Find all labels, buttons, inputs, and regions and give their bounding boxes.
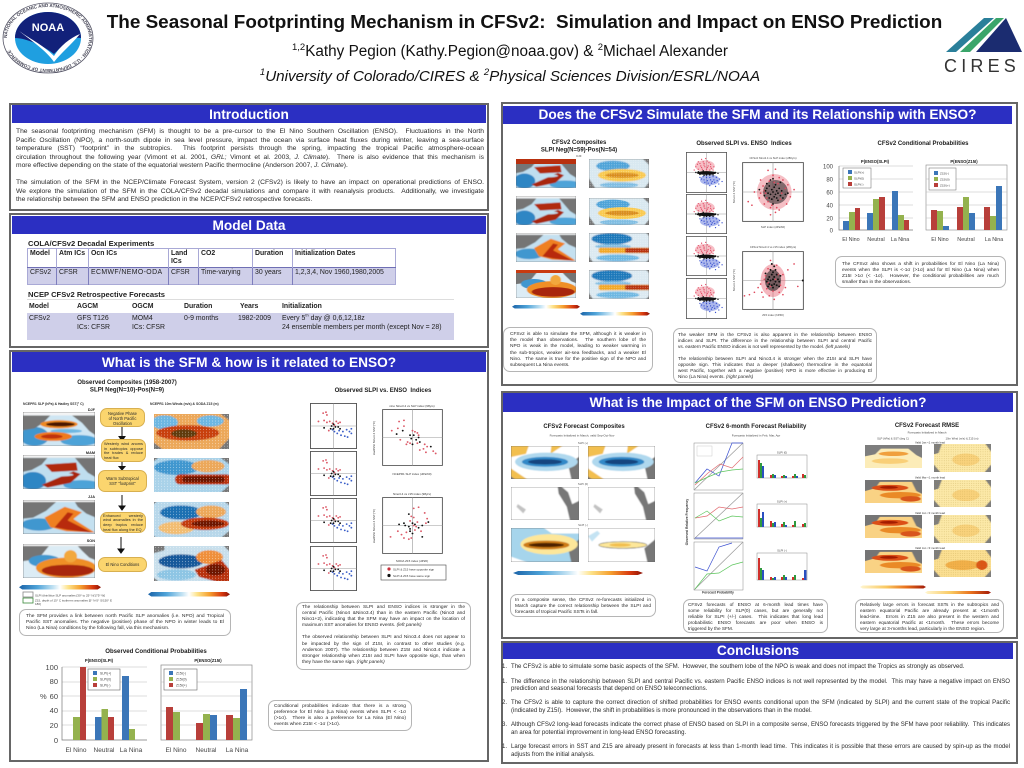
- conclusion 5: Large forecast errors in SST and Z15 are already present in forecasts at less than 1-month lead time. This indicates it is possible that these errors are caused by spin-up as the model: [511, 744, 1010, 750]
- bar chart: P(ENSO|Z15I): [926, 159, 1007, 243]
- table: NCEP retrospective forecasts: [27, 299, 454, 340]
- bar chart: P(ENSO|SLPI): 60: [826, 190, 834, 196]
- bar chart: P(ENSO|SLPI): SLPI(+): [854, 170, 864, 174]
- bar chart: P(ENSO|SLPI): P(ENSO(SLPI): [85, 658, 114, 663]
- bar chart: P(ENSO|SLPI): SLPI(0): [854, 176, 864, 180]
- table: NCEP retrospective forecasts: MOM4: [132, 315, 153, 322]
- flow box: westerly winds: heat flux: [104, 455, 119, 460]
- bar chart: P(ENSO|SLPI): SLPI(+): [100, 672, 111, 676]
- table: NCEP retrospective forecasts: 24 ensemble members per month (except Nov = 28): [282, 324, 442, 330]
- callout: conditional probabilities: [268, 700, 412, 731]
- bar chart: P(ENSO|SLPI): 80: [50, 677, 58, 686]
- scatter plot: Z15 index: Nino3.4 vs z15 index (98yrs): [393, 492, 431, 496]
- callout: CFSv2 probability shift: smaller than in the observations.: [842, 280, 911, 285]
- map series: winds and Z15 composites: [150, 410, 234, 585]
- table: NCEP retrospective forecasts: 1982-2009: [238, 315, 271, 322]
- flow box: negative phase: [100, 408, 145, 427]
- callout: weaker SFM: The relationship between SLPI and Nino3.4 is stronger when the Z15I and SLPI have: [678, 356, 872, 361]
- colorbar: winds: [580, 312, 650, 316]
- header: title and logos: [2, 2, 1022, 85]
- table: COLA decadal experiments: ECMWF/NEMO-ODA: [91, 269, 162, 276]
- legend: scatter: [381, 565, 446, 580]
- flow box: enhanced westerly: heat flux along the EQ: [103, 527, 142, 532]
- scatter plot: Z15 index: [372, 492, 442, 563]
- flow box: westerly winds: the trades & reduce: [104, 450, 143, 455]
- callout: SLPI relationship: The relationship between SLPI and ENSO indices is stronger in the: [302, 605, 465, 610]
- icon: NOAA logo: NOAA: [32, 22, 64, 34]
- maps: RMSE winds and Z15: Valid Jan <1 month lead: [915, 440, 945, 444]
- chart title: SLP: NCEPR1 SLP (hPa) & Hadley SST(° C): [23, 402, 84, 406]
- text block: introduction: temperature (SST) “footprint” in the subtropics. This footprint persists through the spring, impacting the tropical Pacific atmosphere-ocean: [16, 145, 484, 152]
- bar chart: P(ENSO|SLPI): Neutral: [867, 237, 885, 243]
- flow box: enhanced westerly: Enhanced westerly: [103, 512, 143, 518]
- heading: Introduction: [12, 105, 486, 123]
- table: NCEP retrospective forecasts: 0-9 months: [184, 315, 218, 322]
- table: NCEP retrospective forecasts: ICs: CFSR: [77, 324, 110, 330]
- bar chart: P(ENSO|Z15I): Z15I(-): [176, 672, 186, 676]
- flow box: El Nino conditions: El Nino Conditions: [106, 562, 139, 567]
- callout: weaker SFM: [673, 328, 877, 383]
- table: COLA decadal experiments: Time-varying: [201, 269, 241, 276]
- title: The Seasonal Footprinting Mechanism in CFSv2: Simulation and Impact on ENSO Prediction: [107, 12, 942, 33]
- scatter plots: SLPI vs ENSO: [310, 403, 357, 591]
- bar chart: P(ENSO|SLPI): 0: [830, 228, 834, 234]
- legend: scatter: SLPI & Z15 have same sign: [393, 574, 431, 578]
- callout: RMSE: Relatively large errors in forecast SSTs in the subtropics and: [860, 602, 999, 606]
- scatter plot: SLP index: NCEPR1 SLP index (dPa/60): [393, 472, 431, 476]
- flow box: enhanced westerly: wind anomalies in the: [103, 517, 143, 522]
- bar chart: P(ENSO|Z15I): Z15I(0): [940, 178, 950, 182]
- bar chart: P(ENSO|SLPI): [40, 658, 147, 754]
- scatter plot: SLP index: [372, 404, 442, 476]
- affiliations: 1University of Colorado/CIRES & 2Physical Sciences Division/ESRL/NOAA: [260, 67, 760, 85]
- table: NCEP retrospective forecasts: Initialization: [282, 303, 322, 310]
- legend: contours: 180]: [35, 602, 41, 606]
- scatter plot: Z15 index: SODA Z15 index (dP20): [396, 559, 428, 563]
- maps: RMSE winds and Z15: [915, 436, 994, 580]
- table: COLA decadal experiments: 30 years: [255, 269, 281, 276]
- flow box: warm SST footprint: [98, 470, 147, 492]
- table: COLA decadal experiments: CFSv2: [30, 269, 51, 276]
- table: COLA decadal experiments: Initialization Dates: [295, 250, 356, 257]
- maps: RMSE SLP and SST: [862, 436, 925, 576]
- bar chart: SLPI(0) counts: [757, 450, 807, 478]
- bar chart: P(ENSO|SLPI): %: [40, 692, 47, 701]
- panel: Model Data: [9, 213, 489, 348]
- bar chart: P(ENSO|SLPI): 0: [54, 736, 58, 745]
- conclusion 4: an area for potential improvement in long-lead ENSO forecasting.: [511, 730, 686, 736]
- conclusion 2: [502, 678, 1010, 692]
- callout: weaker SFM: west Pacific, together with a negative (positive) NPO is more effective in producing El: [678, 368, 872, 373]
- table: COLA decadal experiments: CO2: [201, 250, 215, 257]
- line chart: reliability SLPI(-): [694, 542, 743, 590]
- scatter plot: Nino3.4 vs Z15: [732, 245, 803, 317]
- flow arrow: [118, 537, 124, 553]
- bar chart: P(ENSO|Z15I): La Nina: [985, 237, 1003, 243]
- colorbar: SLP: [19, 585, 101, 590]
- scatter plot: Nino3.4 vs Z15: CFSv2 Nino3.4 vs z15 index (280yrs): [750, 245, 796, 249]
- text block: introduction: The simulation of the SFM in the NCEP/Climate Forecast System, version 2 (CFSv2) is likely to have an impact on operational predictions of ENSO.: [16, 179, 484, 186]
- callout: reliability: triggered by the SFM.: [688, 626, 733, 631]
- conclusion 3: [502, 700, 1010, 714]
- bar chart: SLPI(-) counts: [757, 548, 807, 580]
- scatter plot: Nino3.4 vs SLP: Nino3.4 SST(°C): [732, 181, 736, 203]
- map series: SLP and SST composites: [19, 408, 101, 582]
- panel: Conclusions: [501, 641, 1018, 764]
- bar chart: P(ENSO|SLPI): 40: [50, 706, 58, 715]
- callout: CFSv2 SFM simulation: subsequent La Nina events.: [510, 363, 569, 368]
- callout: RMSE: eastern equatorial Pacific at <1month. These errors become: [860, 620, 999, 625]
- conclusion 2: The difference in the relationship between SLPI and central Pacific vs. eastern Pacific ENSO indices is not well represented by the model. This may have a negative impact on ENSO: [511, 678, 1010, 684]
- callout: SFM link: [19, 609, 231, 636]
- table: NCEP retrospective forecasts: ICs: CFSR: [132, 324, 165, 330]
- text block: introduction: the relationship between the SFM and ENSO prediction in the NCEP/CFSv2 retrospective forecasts.: [16, 196, 312, 203]
- bar chart: P(ENSO|Z15I): Neutral: [196, 747, 217, 754]
- callout: SLPI relationship: maximum SST anomalies for ENSO events. (left panels): [302, 623, 422, 628]
- flow box: enhanced westerly: deep tropics reduce: [103, 522, 143, 527]
- conclusion 5: adjusts from the initial analysis.: [511, 752, 595, 758]
- callout: weaker SFM: The weaker SFM in the CFSv2 is also apparent in the relationship between ENSO: [678, 332, 872, 336]
- table: COLA decadal experiments: CFSR: [59, 269, 78, 276]
- bar chart: P(ENSO|Z15I): La Nina: [226, 747, 249, 754]
- axis labels: reliability: [685, 499, 734, 594]
- bar chart: P(ENSO|Z15I): Z15I(0): [176, 678, 187, 682]
- colorbar: winds: [148, 592, 230, 596]
- flow box: negative phase: Negative Phase: [108, 410, 137, 416]
- table title: COLA: COLA/CFSv2 Decadal Experiments: [28, 239, 154, 248]
- panel: Conclusions: 1.: [502, 678, 507, 684]
- bar chart: P(ENSO|SLPI): El Nino: [66, 747, 87, 754]
- callout: weaker SFM: indices and SLPI. The difference in the relationship between SLPI and central Pacific: [678, 338, 872, 343]
- flow box: warm SST footprint: Warm Subtropical: [106, 476, 139, 481]
- bar chart: P(ENSO|SLPI): 100: [45, 663, 58, 672]
- callout: conditional probabilities: events when Z15I < -1σ (>1σ).: [274, 722, 340, 727]
- colorbar: RMSE SLP: [860, 586, 926, 588]
- text block: introduction: more effective depending on the state of the equatorial western Pacific thermocline (Anderson 2007, J. Climate).: [16, 162, 348, 169]
- line chart: reliability SLPI(0): [694, 493, 743, 539]
- callout: SFM link: The SFM provides a link between north Pacific SLP anomalies (i.e. NPO) and Tropical: [26, 614, 224, 618]
- callout: RMSE: eastern equatorial Pacific are already present at <1month: [860, 608, 999, 613]
- heading: conditional probabilities: Observed Conditional Probabilities: [105, 648, 207, 655]
- table: COLA decadal experiments: Land ICs: [171, 250, 187, 265]
- maps: RMSE winds and Z15: Valid Jun <3 month lead: [915, 511, 945, 515]
- table: NCEP retrospective forecasts: Duration: [184, 303, 212, 310]
- flow box: warm SST footprint: SST “footprint”: [109, 481, 136, 486]
- callout: CFSv2 SFM simulation: NPO is weak in the model, leading to weaker warming in: [510, 344, 646, 349]
- callout: SFM link: Nino (La Nina) conditions by the following fall, via this mechanism.: [26, 626, 169, 631]
- table: NCEP retrospective forecasts: AGCM: [77, 303, 98, 310]
- heading: CFSv2 composites: CFSv2 Composites: [552, 140, 606, 146]
- callout: CFSv2 SFM simulation: the model than observations. The southern lobe of the: [510, 338, 646, 343]
- bar chart: P(ENSO|Z15I): Z15I(+): [940, 184, 950, 188]
- text block: introduction: The seasonal footprinting mechanism (SFM) is thought to be a pre-cursor to the El Nino Southern Oscillation (ENSO). Fluctuations in the North: [16, 128, 484, 135]
- conclusion 2: prediction and seasonal forecasts that depend on ENSO teleconnections.: [511, 686, 707, 692]
- table: NCEP retrospective forecasts: OGCM: [132, 303, 153, 310]
- bar chart: P(ENSO|SLPI): 100: [823, 164, 834, 170]
- callout: forecast composites: [510, 594, 656, 617]
- table: NCEP retrospective forecasts: GFS T126: [77, 315, 109, 322]
- callout: forecast composites: March capture the correct relationship between the SLPI and: [515, 604, 651, 609]
- callout: reliability: [683, 599, 828, 633]
- callout: SLPI relationship: The observed relationship between SLPI and Nino3.4 does not appear to: [302, 635, 465, 640]
- text block: introduction: circulation throughout the following year (Vimont et al. 2001, GRL; Vimont et al. 2003, J. Climate). There is also evidence that this mechanism is: [16, 154, 484, 160]
- panel: Conclusions: 1.: [502, 744, 507, 750]
- heading: observed composites: Observed Composites (1958-2007): [77, 379, 177, 386]
- flow box: negative phase: of North Pacific: [109, 416, 136, 420]
- flow arrow: [119, 427, 125, 441]
- map series: SLP and SST composites: JJA: [88, 495, 95, 499]
- maps: RMSE winds and Z15: Valid Jun <3 month lead: [915, 546, 945, 550]
- maps: CFSv2 SLP and SST composites: DJF: [576, 154, 582, 158]
- table: NCEP retrospective forecasts: CFSv2: [29, 315, 50, 322]
- bar chart: P(ENSO|SLPI): P(ENSO(SLPI): [861, 159, 890, 164]
- icon: CIRES logo: [944, 18, 1022, 76]
- heading: CFSv2 conditional probabilities: CFSv2 Conditional Probabilities: [877, 141, 969, 147]
- flow box: negative phase: Oscillation: [113, 420, 132, 426]
- subheading: RMSE: Forecasts Initialized in March: [908, 430, 947, 434]
- callout: SLPI relationship: be impacted by the sign of Z15I, in contrast to other studies (e.g.: [302, 642, 465, 647]
- callout: SLPI relationship: Anderson 2007). The relationship between Z15I and Nino3.4 indicate a: [302, 648, 465, 653]
- callout: reliability: some reliability for SLP(0) cases, but are generally not: [688, 608, 823, 613]
- panel: Does the CFSv2 simulate the SFM: [501, 102, 1018, 386]
- bar chart: SLPI(-) counts: SLPI (-): [777, 548, 787, 552]
- heading: Impact of the SFM: [503, 393, 1013, 412]
- scatter plots: CFSv2 SLPI vs ENSO: [686, 152, 727, 319]
- callout: conditional probabilities: (>1σ). There is also a preference for La Nina (El Nino): [274, 716, 406, 721]
- bar chart: P(ENSO|SLPI): El Nino: [842, 237, 860, 243]
- callout: CFSv2 probability shift: The CFSv2 also shows a shift in probabilities for El Nino (La Nina): [842, 262, 999, 266]
- flow box: El Nino conditions: [98, 557, 147, 572]
- table: NCEP retrospective forecasts: Model: [29, 303, 49, 310]
- colorbar: forecast composites: [513, 571, 643, 575]
- callout: weaker SFM: opposite sign. This indicates that a deeper (shallower) thermocline in the equatorial: [678, 362, 872, 367]
- callout: CFSv2 probability shift: [835, 256, 1006, 288]
- callout: CFSv2 SFM simulation: [503, 327, 653, 372]
- text block: introduction: [16, 128, 484, 203]
- maps: forecast composites: SLPI (0): [578, 482, 588, 486]
- callout: RMSE: very large at 3-months lead, particularly in the ENSO region.: [860, 626, 985, 631]
- heading: Impact of the SFM: What is the Impact of the SFM on ENSO Prediction?: [590, 395, 926, 410]
- subheading: reliability: Forecasts Initialized in Feb, Mar, Apr: [732, 434, 780, 438]
- maps: RMSE SLP and SST: SLP (hPa) & SST (deg C): [877, 436, 909, 440]
- heading: Conclusions: Conclusions: [717, 643, 799, 658]
- bar chart: SLPI(0) counts: SLPI (0): [777, 450, 787, 454]
- bar chart: P(ENSO|Z15I): P(ENSO(Z15I): [194, 658, 222, 663]
- bar chart: P(ENSO|Z15I): El Nino: [931, 237, 949, 243]
- map series: SLP and SST composites: SON: [87, 539, 95, 543]
- axis labels: reliability: Observed Relative Frequency: [685, 499, 689, 545]
- flow box: westerly winds: Westerly wind anoms: [104, 441, 143, 446]
- maps: forecast composites: SLPI (+): [578, 441, 588, 445]
- bar chart: P(ENSO|SLPI): SLPI(-): [854, 182, 864, 186]
- maps: forecast composites: [507, 441, 659, 566]
- callout: SLPI relationship: central Pacific (Nino4 &Nino3.4) than in the eastern Pacific (Nino3 and: [302, 611, 465, 616]
- heading: Model Data: Model Data: [212, 218, 286, 232]
- chart title: winds: NCEPR1 10m Winds (m/s) & SODA Z15 (m): [150, 402, 219, 406]
- callout: RMSE: lead-time. Errors in Z15 are also present in the western and: [860, 614, 999, 619]
- bar chart: P(ENSO|SLPI): 60: [50, 692, 58, 701]
- heading: CFSv2 composites: SLPI Neg(N=59)-Pos(N=54): [541, 147, 617, 153]
- flow arrow: [119, 462, 125, 470]
- icon: NOAA logo: NATIONAL OCEANIC AND ATMOSPHERIC ADMINISTRATION · U.S. DEPARTMENT OF COMMERCE: [4, 4, 92, 72]
- callout: conditional probabilities: Conditional probabilities indicate that there is a strong: [274, 704, 406, 709]
- heading: What is the SFM: What is the SFM & how is it related to ENSO?: [102, 354, 396, 370]
- flow box: westerly winds: [101, 439, 146, 462]
- axis labels: reliability: Forecast Probability: [702, 590, 734, 594]
- panel: Conclusions: 1.: [502, 664, 507, 670]
- bar chart: P(ENSO|Z15I): P(ENSO(Z15I): [950, 159, 978, 164]
- bar chart: P(ENSO|SLPI): [823, 159, 913, 243]
- bar chart: P(ENSO|Z15I): [161, 658, 252, 754]
- flow box: enhanced westerly: [100, 512, 146, 533]
- bar chart: P(ENSO|SLPI): 40: [826, 204, 834, 210]
- maps: CFSv2 winds and Z15 composites: [585, 156, 653, 302]
- text block: conclusions: [502, 664, 1010, 758]
- scatter plot: Nino3.4 vs SLP: [732, 156, 803, 229]
- maps: CFSv2 SLP and SST composites: [512, 154, 582, 301]
- bar chart: P(ENSO|SLPI): La Nina: [891, 237, 909, 243]
- heading: Model Data: [12, 216, 486, 234]
- conclusion 4: [502, 722, 1010, 736]
- bar chart: P(ENSO|SLPI): 20: [826, 216, 834, 222]
- legend: contours: SLPI (thin/blue SLP anomalies [30° to 25° N/175° W]: [35, 594, 105, 598]
- bar chart: P(ENSO|Z15I): Neutral: [957, 237, 975, 243]
- callout: CFSv2 SFM simulation: Nino. The same is true for the positive sign of the NPO and: [510, 357, 646, 362]
- table: COLA decadal experiments: 1,2,3,4, Nov 1960,1980,2005: [295, 269, 384, 276]
- table: COLA decadal experiments: [27, 248, 396, 285]
- scatter plot: Nino3.4 vs Z15: Nino3.4 SST(°C): [732, 269, 736, 291]
- maps: RMSE winds and Z15: Valid Mar <1 month lead: [915, 476, 946, 480]
- callout: SLPI relationship: they have the same sign. (right panels): [302, 660, 385, 665]
- conclusion 3: (indicated by Z15I). However, the shift in probabilities is more pronounced in the observations than in the model.: [511, 708, 812, 714]
- icon: CIRES logo: CIRES: [944, 56, 1020, 76]
- callout: reliability: CFSv2 forecasts of ENSO at 6-month lead times have: [688, 602, 823, 606]
- maps: forecast composites: SLPI (-): [578, 523, 588, 527]
- callout: SLPI relationship: [296, 602, 471, 670]
- flow arrow: [119, 495, 125, 510]
- scatter plot: Nino3.4 vs SLP: CFSv2 Nino3.4 vs SLP index (280yrs): [749, 156, 797, 160]
- bar chart: P(ENSO|Z15I): Z15I(+): [176, 684, 187, 688]
- bar chart: P(ENSO|SLPI): La Nina: [120, 747, 143, 754]
- panel: Impact of the SFM on ENSO prediction: [501, 391, 1018, 639]
- line chart: reliability SLPI(+): [694, 443, 743, 490]
- heading: Does the CFSv2 simulate: Does the CFSv2 Simulate the SFM and its Relationship with ENSO?: [538, 107, 977, 122]
- callout: conditional probabilities: preference for El Nino (La Nina) events when SLPI < -1σ: [274, 710, 406, 715]
- panel: Introduction: [9, 103, 489, 211]
- bar chart: P(ENSO|SLPI): 80: [826, 178, 834, 184]
- heading: observed SLPI: Observed SLPI vs. ENSO Indices: [696, 141, 792, 147]
- authors: 1,2Kathy Pegion (Kathy.Pegion@noaa.gov) & 2Michael Alexander: [292, 42, 728, 60]
- legend: contours: [23, 592, 112, 606]
- callout: CFSv2 SFM simulation: the sub-tropics, weaker air-sea feedbacks, and a weaker El: [510, 351, 646, 356]
- table: COLA decadal experiments: Atm ICs: [59, 250, 85, 257]
- map series: SLP and SST composites: DJF: [88, 408, 96, 412]
- legend: contours: Z15, depth of 15° C isotherm anomalies [5° N-5° S/150° E: [35, 598, 112, 602]
- scatter plot: SLP index: nino Nino3.4 vs SLP index (98yrs): [389, 404, 435, 408]
- callout: reliability: probabilistic ENSO forecasts are poor when ENSO is: [688, 620, 823, 625]
- conclusion 5: [502, 744, 1010, 758]
- scatter plot: Nino3.4 vs SLP: SLP index (dPa/60): [761, 225, 785, 229]
- bar chart: P(ENSO|SLPI): SLPI(-): [100, 684, 110, 688]
- table: COLA decadal experiments: Ocn ICs: [91, 250, 117, 257]
- bar chart: SLPI(+) counts: [757, 500, 807, 527]
- table: COLA decadal experiments: Model: [30, 250, 50, 257]
- colorbar: SLP: [512, 305, 580, 308]
- callout: forecast composites: forecasts of tropical Pacific SSTs in fall.: [515, 610, 598, 615]
- conclusion 4: Although CFSv2 long-lead forecasts indicate the correct phase of ENSO based on SLPI in a composite sense, ENSO forecasts triggered by the SFM have poor reliability. This indicates: [511, 722, 1010, 728]
- scatter plot: SLP index: HadISSt Nino3.4 SST(°C): [372, 421, 376, 455]
- callout: CFSv2 probability shift: events when the SLPI is <-1σ (>1σ) and for El Nino (La Nina) when: [842, 268, 999, 273]
- callout: reliability: reliable for SLPI (+/-) cases. This indicates that long lead: [688, 614, 823, 619]
- bar chart: P(ENSO|SLPI): SLPI(0): [100, 678, 111, 682]
- conclusion 1: The CFSv2 is able to simulate some basic aspects of the SFM. However, the southern lobe of the NPO is weak and does not impact the Tropics as strongly as observed.: [511, 664, 964, 670]
- text block: introduction: Pacific Oscillation (NPO), a north-south dipole in sea level pressure, impact the ocean via surface heat fluxes during winter, leaving a sea-surface: [16, 136, 484, 144]
- panel: Conclusions: 2.: [502, 700, 507, 706]
- table: NCEP retrospective forecasts: Years: [240, 303, 258, 310]
- callout: SLPI relationship: stronger relationship when Z15I and SLPI have opposite sign, than when: [302, 654, 465, 659]
- callout: weaker SFM: vs. eastern Pacific ENSO indices is not well represented by the model. (left panels): [678, 344, 850, 349]
- callout: CFSv2 probability shift: Z15I >1σ (< -1σ). However, the conditional probabilities are much: [842, 274, 999, 279]
- callout: forecast composites: In a composite sense, the CFSv2 re-forecasts initialized in: [515, 598, 651, 602]
- table title: NCEP: NCEP CFSv2 Retrospective Forecasts: [28, 290, 165, 299]
- heading: reliability: CFSv2 6-month Forecast Reliability: [706, 424, 807, 430]
- heading: observed SLPI: Observed SLPI vs. ENSO Indices: [335, 387, 432, 394]
- table: NCEP retrospective forecasts: Every 5th day @ 0,6,12,18z: [282, 313, 365, 322]
- legend: scatter: SLPI & Z15 have opposite sign: [393, 568, 435, 572]
- conclusion 3: The CFSv2 is able to capture the correct direction of shifted probabilities for ENSO events conditional upon the SFM (indicated by SLPI) and the current state of the tropical Pacific: [511, 700, 1010, 706]
- subheading: forecast composites: Forecasts Initialized in March, valid Sep-Oct-Nov: [550, 434, 615, 438]
- heading: What is the SFM: [12, 352, 486, 372]
- colorbar: RMSE wind: [925, 591, 991, 594]
- flow box: westerly winds: in subtropics oppose: [104, 446, 143, 451]
- table: COLA decadal experiments: Duration: [255, 250, 283, 257]
- callout: SFM link: Pacific SST anomalies. The negative (positive) phase of the NPO in winter leads to El: [26, 620, 224, 625]
- callout: RMSE: [855, 599, 1004, 633]
- maps: RMSE winds and Z15: 10m Wind (m/s) & Z15 (m): [946, 436, 979, 440]
- text block: introduction: We explore the simulation of the SFM in the COLA/CFSv2 decadal simulations and compare it with reanalysis products. Additionally, we investigate: [16, 188, 484, 194]
- panel: What is the SFM: [9, 350, 489, 762]
- callout: weaker SFM: Nino (La Nina) events. (right panels): [678, 374, 753, 379]
- heading: Introduction: Introduction: [209, 106, 289, 122]
- scatter plot: Z15 index: HadISSt Nino3.4 SST(°C): [372, 509, 376, 543]
- panel: Conclusions: 3.: [502, 722, 507, 728]
- heading: forecast composites: CFSv2 Forecast Composites: [543, 424, 625, 430]
- bar chart: P(ENSO|SLPI): 20: [50, 721, 58, 730]
- bar chart: P(ENSO|SLPI): Neutral: [94, 747, 115, 754]
- callout: SLPI relationship: Nino1+2), indicating that the SFM may have an impact on the location of: [302, 617, 465, 622]
- map series: SLP and SST composites: MAM: [86, 451, 95, 455]
- table: COLA decadal experiments: CFSR: [171, 269, 190, 276]
- heading: RMSE: CFSv2 Forecast RMSE: [895, 423, 959, 429]
- bar chart: P(ENSO|Z15I): Z15I(-): [940, 172, 949, 176]
- scatter plot: Nino3.4 vs Z15: Z15 index (hPZ0): [762, 313, 784, 317]
- heading: observed composites: SLPI Neg(N=10)-Pos(N=9): [90, 386, 164, 393]
- bar chart: P(ENSO|Z15I): El Nino: [166, 747, 187, 754]
- bar chart: SLPI(+) counts: SLPI (+): [777, 500, 787, 504]
- heading: Conclusions: [503, 643, 1013, 658]
- callout: CFSv2 SFM simulation: CFSv2 is able to simulate the SFM, although it is weaker in: [510, 332, 646, 337]
